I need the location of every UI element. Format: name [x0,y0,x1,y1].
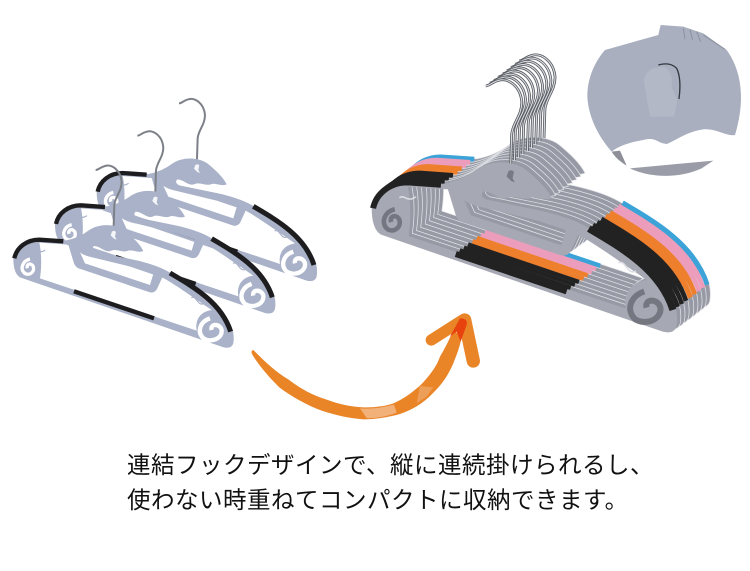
caption text: 連結フックデザインで、縦に連続掛けられるし、 [127,452,654,478]
arrow dry brush patch [360,386,433,418]
inset: zoomed detail of linking hook [587,25,741,176]
left group: three separate hangers [13,99,317,348]
inset body [587,25,741,152]
inset lower wedge [612,151,627,166]
inset lower rail [630,161,713,176]
hanger: front [13,166,234,348]
inset tab [644,64,680,117]
arrow shaft [252,330,462,419]
right group: stacked linked hangers [372,55,710,332]
arrow overlap [450,318,467,342]
caption text [127,452,654,513]
stack layers [372,55,710,332]
arrow: hand-painted orange [252,318,473,419]
hanger: middle [55,131,275,313]
inset ribs [683,28,725,49]
arrow head [431,320,473,361]
caption text: 使わない時重ねてコンパクトに収納できます。 [127,487,629,513]
hanger: back [97,99,317,281]
